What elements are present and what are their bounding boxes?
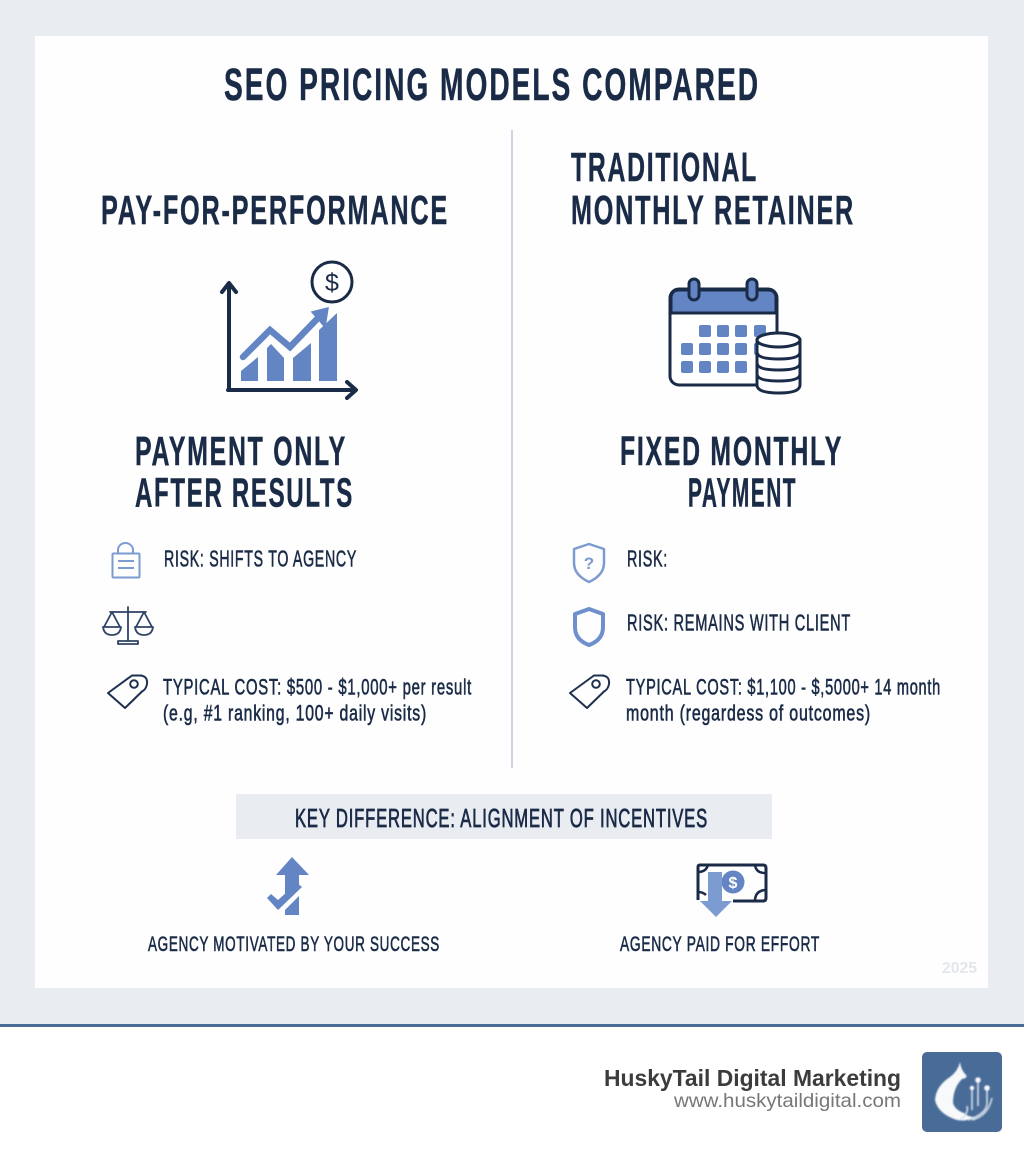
year label: 2025 bbox=[942, 960, 977, 977]
subheading: fixed monthly payment bbox=[620, 428, 843, 516]
text: typical cost pay-for-performance bbox=[163, 674, 472, 726]
text: typical cost pay-for-performance: TYPICAL COST: $500 - $1,000+ per result bbox=[163, 674, 472, 700]
subheading: fixed monthly payment: FIXED MONTHLY bbox=[620, 428, 843, 474]
banner: key difference bbox=[236, 794, 772, 839]
icon: growth chart with dollar coin: $ bbox=[325, 269, 339, 297]
text: agency motivated: AGENCY MOTIVATED BY YOUR SUCCESS bbox=[148, 933, 440, 956]
icon: shield question bbox=[574, 544, 604, 582]
heading: traditional monthly retainer: MONTHLY RETAINER bbox=[571, 187, 855, 233]
icon: price tag bbox=[570, 676, 609, 708]
icon: padlock document bbox=[112, 543, 140, 578]
panel: pay-for-performance column bbox=[101, 187, 472, 726]
footer bbox=[0, 1024, 1024, 1132]
text: risk: RISK: bbox=[627, 546, 668, 572]
text: risk remains with client: RISK: REMAINS WITH CLIENT bbox=[627, 610, 851, 636]
panel: traditional retainer column bbox=[570, 144, 941, 726]
subheading: fixed monthly payment: PAYMENT bbox=[688, 470, 797, 516]
text: agency paid for effort: AGENCY PAID FOR EFFORT bbox=[620, 933, 820, 956]
panel: main card bbox=[35, 36, 988, 988]
icon: banknote with down arrow: $ bbox=[729, 875, 738, 892]
icon: price tag bbox=[108, 676, 147, 708]
heading: pay-for-performance: PAY-FOR-PERFORMANCE bbox=[101, 187, 449, 233]
icon: calendar with coin stack bbox=[670, 279, 800, 393]
text: typical cost retainer: month (regardess of outcomes) bbox=[626, 700, 871, 726]
heading: traditional monthly retainer bbox=[571, 144, 855, 233]
text: typical cost pay-for-performance: (e.g, #1 ranking, 100+ daily visits) bbox=[163, 700, 427, 726]
column divider bbox=[511, 130, 513, 768]
icon: balance scale bbox=[103, 607, 153, 644]
icon: banknote with down arrow bbox=[698, 865, 766, 917]
icon: shield question: ? bbox=[584, 554, 594, 573]
subheading: payment only after results: PAYMENT ONLY bbox=[135, 428, 347, 474]
text: typical cost retainer bbox=[626, 674, 941, 726]
icon: up arrow with check bbox=[267, 857, 309, 915]
footer website: www.huskytaildigital.com bbox=[673, 1090, 901, 1112]
footer brand name: HuskyTail Digital Marketing bbox=[604, 1065, 901, 1091]
icon: shield bbox=[575, 609, 603, 645]
icon: growth chart with dollar coin bbox=[222, 262, 356, 398]
banner: key difference: KEY DIFFERENCE: ALIGNMENT OF INCENTIVES bbox=[295, 803, 708, 833]
text: risk shifts to agency: RISK: SHIFTS TO AGENCY bbox=[164, 546, 357, 572]
subheading: payment only after results bbox=[135, 428, 354, 516]
subheading: payment only after results: AFTER RESULTS bbox=[135, 470, 354, 516]
heading: traditional monthly retainer: TRADITIONAL bbox=[571, 144, 758, 190]
footer logo bbox=[922, 1052, 1002, 1132]
